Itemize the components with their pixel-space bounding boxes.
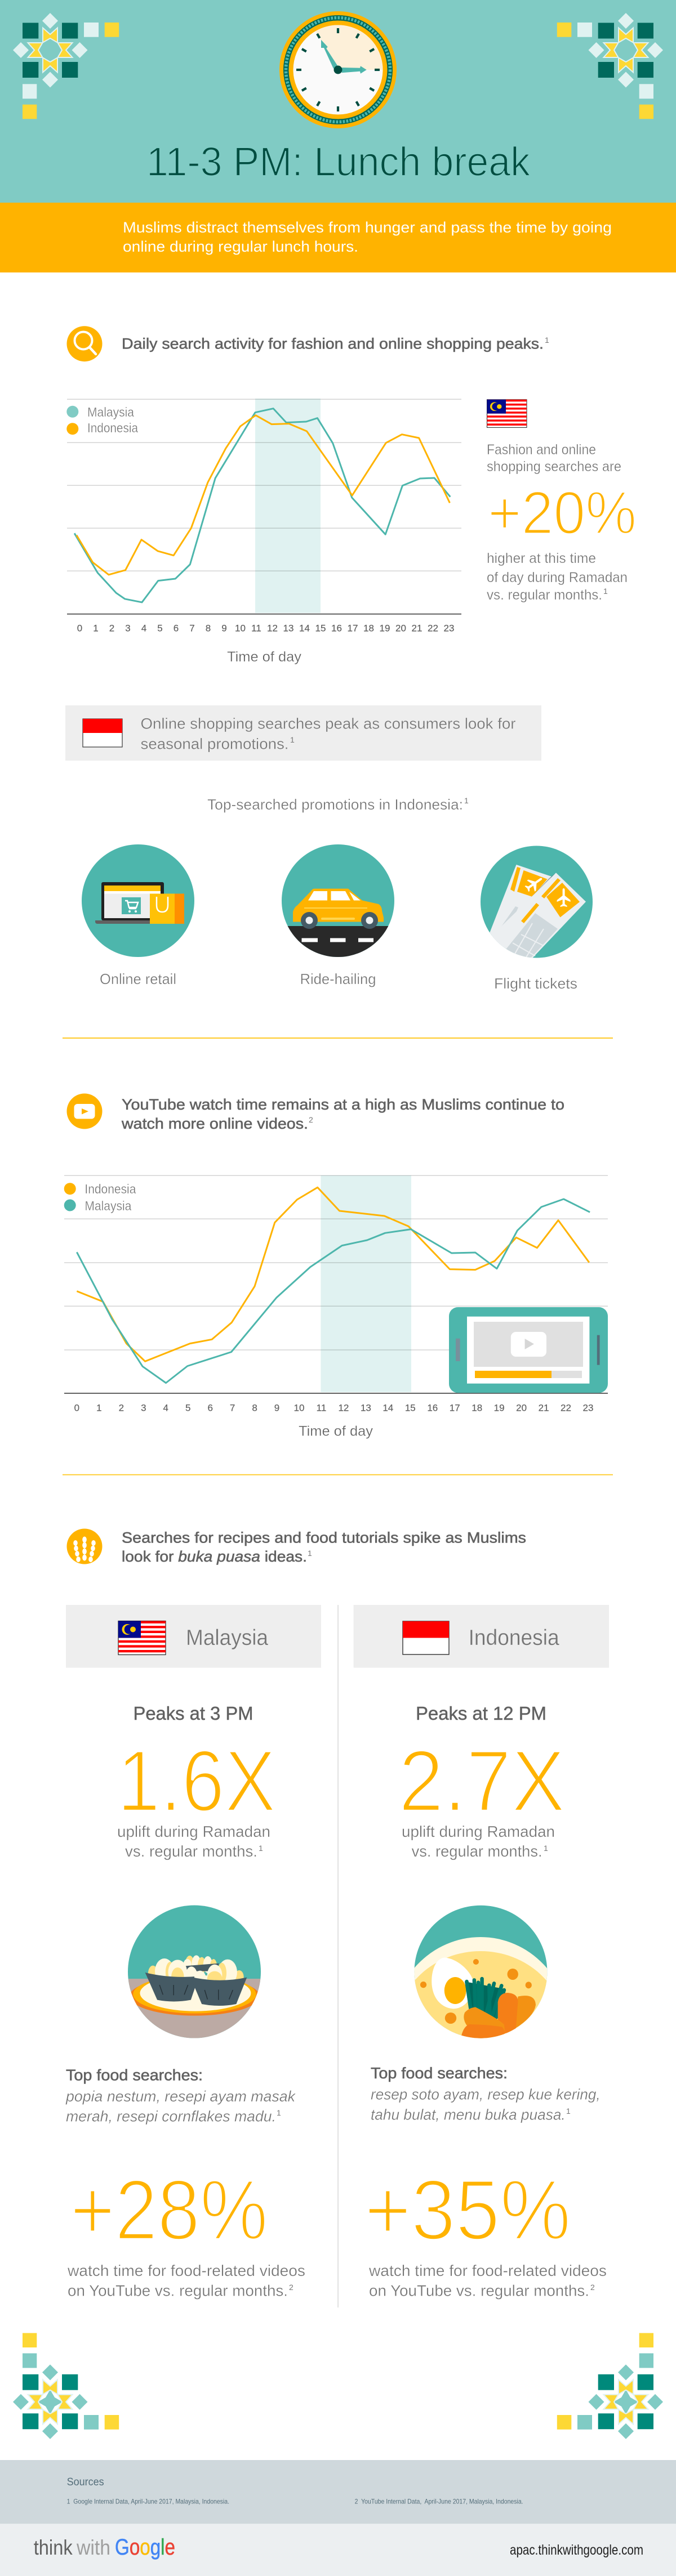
callout: seasonal promotions xyxy=(65,705,541,761)
section divider xyxy=(63,1474,613,1475)
x axis labels: 8 xyxy=(206,623,211,634)
panel: sources: 2 YouTube Internal Data, April-June 2017, Malaysia, Indonesia. xyxy=(355,2498,523,2506)
callout: seasonal promotions: seasonal promotions. xyxy=(141,735,288,752)
callout: +20% Malaysia: vs. regular months. xyxy=(487,587,602,603)
subheading: top-searched promotions: 1 xyxy=(464,796,469,805)
x axis labels: 16 xyxy=(427,1403,438,1414)
x axis labels: 14 xyxy=(383,1403,393,1414)
stat caption: on YouTube vs. regular months. xyxy=(369,2282,589,2300)
line chart: YouTube watch time xyxy=(64,1175,608,1439)
stat caption: on YouTube vs. regular months. xyxy=(68,2282,288,2300)
stat caption: uplift during Ramadan xyxy=(402,1823,555,1840)
x axis labels: 6 xyxy=(174,623,179,634)
column divider xyxy=(337,1605,339,2307)
x axis labels: 9 xyxy=(221,623,227,634)
stat caption: vs. regular months. xyxy=(412,1842,542,1860)
x axis labels: 4 xyxy=(141,623,146,634)
country header: Indonesia xyxy=(354,1605,609,1667)
x axis labels: 1 xyxy=(96,1403,102,1414)
logo: think with Google: with xyxy=(76,2536,110,2559)
callout: +20% Malaysia: +20% xyxy=(488,478,637,547)
x axis labels xyxy=(77,623,454,634)
x axis labels: 21 xyxy=(412,623,422,634)
stat: 2.7X: 2.7X xyxy=(399,1732,566,1830)
legend: Indonesia xyxy=(87,421,138,435)
peak time: Peaks at 3 PM xyxy=(133,1703,254,1724)
icon: online retail xyxy=(82,844,194,957)
x axis labels: 22 xyxy=(561,1403,571,1414)
x axis labels: 13 xyxy=(283,623,293,634)
x axis labels: 4 xyxy=(163,1403,168,1414)
top food searches: Malaysia: Top food searches: xyxy=(66,2066,203,2084)
top food searches: Indonesia: tahu bulat, menu buka puasa. xyxy=(371,2106,566,2123)
intro banner: online during regular lunch hours. xyxy=(123,238,358,255)
x axis labels: 20 xyxy=(516,1403,527,1414)
x axis labels: 7 xyxy=(230,1403,235,1414)
intro banner xyxy=(0,203,676,272)
x axis labels: 3 xyxy=(141,1403,146,1414)
callout: +20% Malaysia: higher at this time xyxy=(487,551,596,566)
callout: seasonal promotions: 1 xyxy=(290,735,295,744)
x axis labels: 23 xyxy=(583,1403,593,1414)
x axis labels: 15 xyxy=(315,623,326,634)
logo: think with Google: Google xyxy=(115,2535,175,2560)
top food searches: Malaysia: popia nestum, resepi ayam masak xyxy=(65,2088,296,2105)
icon: magnifier xyxy=(66,326,103,361)
panel: sources: Sources xyxy=(67,2476,104,2488)
x axis labels: 5 xyxy=(185,1403,190,1414)
callout: seasonal promotions: Online shopping searches peak as consumers look for xyxy=(141,715,516,732)
footer xyxy=(0,2524,676,2576)
legend: Malaysia xyxy=(84,1198,132,1213)
x axis labels xyxy=(74,1403,593,1414)
stat caption: 2 xyxy=(590,2283,595,2292)
callout: +20% Malaysia: Fashion and online xyxy=(487,442,596,458)
stat caption: vs. regular months. xyxy=(125,1842,257,1860)
icon: ride-hailing car xyxy=(282,844,394,957)
top food searches: Indonesia: resep soto ayam, resep kue kering, xyxy=(371,2086,601,2103)
icon: Malaysia flag xyxy=(487,400,527,427)
x axis labels: 12 xyxy=(338,1403,349,1414)
x axis labels: 18 xyxy=(472,1403,482,1414)
x axis labels: 12 xyxy=(267,623,278,634)
website url: apac.thinkwithgoogle.com xyxy=(510,2542,643,2558)
panel: sources xyxy=(0,2460,676,2524)
callout: +20% Malaysia: 1 xyxy=(603,587,608,596)
x axis labels: 22 xyxy=(428,623,438,634)
top food searches: Malaysia: merah, resepi cornflakes madu. xyxy=(66,2108,276,2125)
x axis labels: 3 xyxy=(125,623,131,634)
section heading: fashion searches xyxy=(66,326,549,361)
logo: think with Google: think xyxy=(34,2536,73,2559)
x axis labels: 23 xyxy=(444,623,454,634)
x axis labels: 0 xyxy=(77,623,82,634)
label: flight tickets: Flight tickets xyxy=(494,975,577,992)
ornament: top left xyxy=(13,13,119,119)
callout: +20% Malaysia: shopping searches are xyxy=(487,459,621,475)
stat caption: 2 xyxy=(289,2283,293,2292)
x axis labels: 5 xyxy=(157,623,163,634)
section heading: YouTube watch time: YouTube watch time remains at a high as Muslims continue to xyxy=(122,1096,564,1113)
stat caption xyxy=(368,2262,607,2300)
x axis labels: 18 xyxy=(363,623,374,634)
x axis labels: 17 xyxy=(348,623,358,634)
ornament: bottom left xyxy=(13,2333,119,2439)
x axis labels: 14 xyxy=(299,623,310,634)
x axis labels: 13 xyxy=(361,1403,371,1414)
subheading: top-searched promotions: Top-searched promotions in Indonesia: xyxy=(207,796,463,813)
stat caption xyxy=(67,2262,305,2300)
ornament: bottom right xyxy=(557,2333,663,2439)
top food searches: Indonesia xyxy=(371,2064,601,2123)
x axis labels: 0 xyxy=(74,1403,79,1414)
icon: flight tickets xyxy=(481,846,593,968)
panel: Malaysia column xyxy=(65,1605,321,2300)
stat: 1.6X: 1.6X xyxy=(117,1732,276,1830)
peak time: Peaks at 12 PM xyxy=(416,1703,546,1724)
x axis labels: 10 xyxy=(294,1403,304,1414)
x axis labels: 15 xyxy=(405,1403,416,1414)
top food searches: Indonesia: 1 xyxy=(566,2107,571,2116)
section heading: fashion searches: Daily search activity for fashion and online shopping peaks. xyxy=(122,336,544,352)
logo: think with Google xyxy=(34,2535,175,2560)
x axis labels: 17 xyxy=(450,1403,460,1414)
stat: +35%: +35% xyxy=(364,2162,571,2258)
label: ride-hailing: Ride-hailing xyxy=(300,971,376,987)
x axis labels: 21 xyxy=(539,1403,549,1414)
x axis labels: 1 xyxy=(93,623,99,634)
stat caption: watch time for food-related videos xyxy=(67,2262,305,2279)
label: online retail: Online retail xyxy=(100,971,176,987)
x axis labels: 8 xyxy=(252,1403,257,1414)
x axis labels: 2 xyxy=(119,1403,124,1414)
country header: Malaysia: Malaysia xyxy=(186,1626,268,1650)
icon: wheat xyxy=(66,1529,103,1564)
title: 11-3 PM: Lunch break xyxy=(146,140,531,185)
x axis labels: 7 xyxy=(189,623,195,634)
legend xyxy=(66,405,138,435)
illustration: soup bowl xyxy=(414,1905,548,2038)
stat caption: 1 xyxy=(259,1844,263,1853)
section heading: recipes and food tutorials: Searches for recipes and food tutorials spike as Muslims xyxy=(122,1530,526,1546)
section heading: recipes and food tutorials: look for buka puasa ideas. xyxy=(122,1548,307,1565)
section divider xyxy=(63,1037,613,1039)
x axis labels: 20 xyxy=(395,623,406,634)
country header: Indonesia: Indonesia xyxy=(469,1626,559,1650)
x axis labels: 11 xyxy=(251,623,261,634)
section heading: YouTube watch time xyxy=(66,1093,564,1132)
icon: tablet video player xyxy=(449,1307,608,1393)
x axis labels: 11 xyxy=(317,1403,326,1414)
section heading: recipes and food tutorials xyxy=(66,1529,526,1565)
country header: Malaysia xyxy=(66,1605,321,1667)
top food searches: Malaysia: 1 xyxy=(277,2108,281,2117)
legend: Malaysia xyxy=(87,405,134,419)
header panel xyxy=(0,0,676,203)
callout: +20% Malaysia xyxy=(487,400,637,603)
icon: clock xyxy=(279,11,397,128)
icon: YouTube play xyxy=(66,1093,103,1129)
top food searches: Malaysia xyxy=(65,2066,296,2125)
line chart: fashion search activity: Time of day xyxy=(227,649,301,665)
section heading: fashion searches: 1 xyxy=(545,336,549,345)
stat caption: uplift during Ramadan xyxy=(117,1823,270,1840)
callout: +20% Malaysia: of day during Ramadan xyxy=(487,570,628,585)
section heading: YouTube watch time: watch more online videos. xyxy=(121,1115,308,1132)
x axis labels: 2 xyxy=(109,623,114,634)
line chart: YouTube watch time: Time of day xyxy=(299,1424,373,1439)
x axis labels: 10 xyxy=(235,623,246,634)
x axis labels: 19 xyxy=(494,1403,505,1414)
stat caption: watch time for food-related videos xyxy=(368,2262,607,2279)
x axis labels: 6 xyxy=(207,1403,213,1414)
stat caption: 1 xyxy=(544,1844,548,1853)
legend: Indonesia xyxy=(84,1182,136,1196)
section heading: recipes and food tutorials: 1 xyxy=(308,1549,312,1558)
section heading: YouTube watch time: 2 xyxy=(309,1115,313,1124)
illustration: dumplings on plate xyxy=(124,1905,265,2041)
panel: sources: 1 Google Internal Data, April-June 2017, Malaysia, Indonesia. xyxy=(67,2498,229,2506)
top food searches: Indonesia: Top food searches: xyxy=(371,2064,508,2082)
stat: +28%: +28% xyxy=(70,2162,268,2258)
x axis labels: 9 xyxy=(274,1403,279,1414)
x axis labels: 16 xyxy=(331,623,342,634)
line chart: fashion search activity xyxy=(66,399,461,665)
stat caption xyxy=(402,1823,555,1860)
x axis labels: 19 xyxy=(380,623,390,634)
panel: Indonesia column xyxy=(354,1605,609,2300)
ornament: top right xyxy=(557,13,663,119)
stat caption xyxy=(117,1823,270,1860)
icon: Indonesia flag xyxy=(83,719,122,747)
intro banner: Muslims distract themselves from hunger and pass the time by going xyxy=(123,219,612,236)
legend xyxy=(64,1182,136,1213)
